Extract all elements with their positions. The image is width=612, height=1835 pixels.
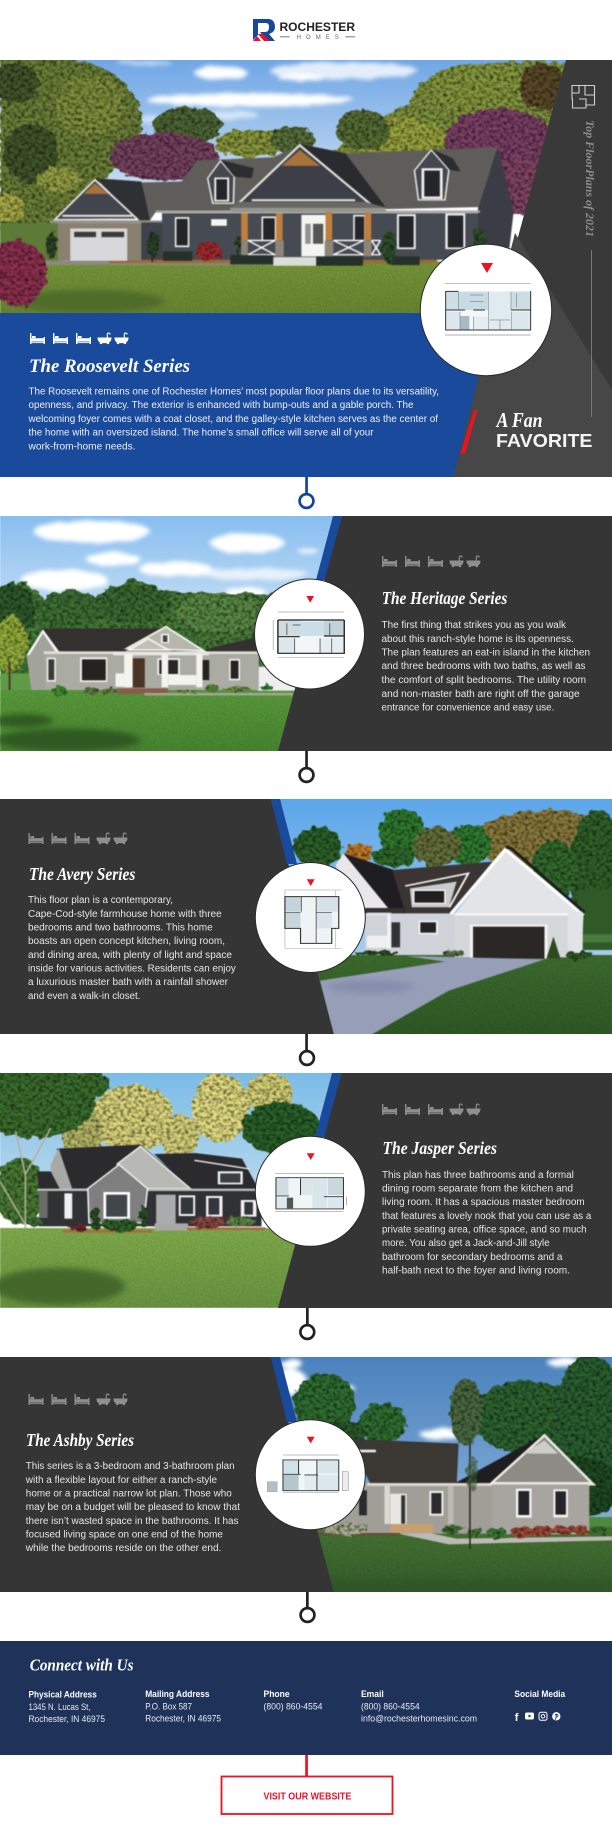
body text: half-bath next to the foyer and living room. bbox=[382, 1266, 570, 1276]
phone bbox=[264, 1689, 322, 1712]
floor plan circle bbox=[420, 244, 552, 376]
connector: hero to Heritage bbox=[300, 477, 313, 508]
floor plan drawing bbox=[275, 1173, 347, 1212]
icon: R house mark bbox=[253, 19, 275, 41]
body text: The first thing that strikes you as you walk bbox=[382, 620, 567, 631]
body text: more. You also get a Jack-and-Jill style bbox=[382, 1238, 550, 1249]
button: visit our website: VISIT OUR WEBSITE bbox=[264, 1792, 352, 1802]
icons: beds and baths bbox=[30, 333, 128, 344]
body text: This floor plan is a contemporary, bbox=[28, 895, 173, 906]
email: (800) 860-4554 bbox=[361, 1702, 420, 1712]
mailing address bbox=[145, 1689, 221, 1724]
panel: Jasper bbox=[0, 1061, 612, 1308]
social media bbox=[514, 1689, 566, 1724]
icon: floor plan outline bbox=[572, 86, 594, 108]
body text: living room. It has a spacious master bedroom bbox=[382, 1197, 585, 1208]
body text: dining room separate from the kitchen and bbox=[382, 1184, 573, 1194]
red marker bbox=[307, 1153, 315, 1160]
panel: Avery bbox=[0, 797, 612, 1035]
lighter facet bbox=[453, 233, 612, 477]
panel: Heritage bbox=[0, 513, 612, 753]
body text: the comfort of split bedrooms. The utility room bbox=[382, 675, 586, 686]
social media: Social Media bbox=[514, 1689, 566, 1700]
body text: about this ranch-style home is its openness. bbox=[382, 634, 574, 645]
mailing address: Rochester, IN 46975 bbox=[145, 1714, 221, 1724]
physical address: 1345 N. Lucas St, bbox=[28, 1702, 90, 1713]
phone: (800) 860-4554 bbox=[264, 1702, 322, 1712]
email: Email bbox=[361, 1689, 384, 1700]
body text: and even a walk-in closet. bbox=[28, 991, 140, 1002]
body text bbox=[382, 620, 590, 714]
heading: The Ashby Series bbox=[26, 1430, 134, 1450]
floor plan circle bbox=[255, 1136, 365, 1246]
body text: and non-master bath are right off the garage bbox=[382, 689, 580, 700]
body text: a luxurious master bath with a rainfall shower bbox=[28, 977, 229, 988]
body text: openness, and privacy. The exterior is enhanced with bump-outs and a gable porch. The bbox=[28, 400, 414, 411]
photo: Roosevelt house bbox=[0, 60, 566, 313]
physical address bbox=[28, 1690, 105, 1725]
body text: the home with an oversized island. The home’s small office will serve all of your bbox=[28, 428, 374, 439]
body text: welcoming foyer comes with a coat closet, and the galley-style kitchen serves as the center of bbox=[28, 414, 438, 425]
rotated series tag: Top FloorPlans of 2021 bbox=[583, 120, 597, 237]
body text: with a flexible layout for either a ranch-style bbox=[25, 1475, 217, 1486]
heading: The Jasper Series bbox=[382, 1138, 497, 1158]
red marker bbox=[306, 596, 314, 603]
dark text panel bbox=[0, 799, 334, 1034]
button: visit our website bbox=[222, 1776, 392, 1814]
physical address: Physical Address bbox=[28, 1690, 97, 1700]
body text bbox=[28, 895, 236, 1002]
body text: boasts an open concept kitchen, living room, bbox=[28, 936, 225, 947]
icon: pinterest bbox=[552, 1712, 560, 1721]
blue accent strip bbox=[271, 799, 297, 864]
photo: Ashby house bbox=[271, 1357, 612, 1592]
body text bbox=[382, 1170, 592, 1276]
floor plan circle bbox=[255, 862, 365, 972]
footer heading: Connect with Us bbox=[30, 1656, 134, 1674]
floor plan drawing bbox=[273, 612, 344, 657]
callout: A Fan Favorite bbox=[460, 408, 592, 454]
floor plan circle bbox=[255, 1420, 365, 1530]
heading: The Avery Series bbox=[29, 864, 136, 884]
body text: and dining area, with plenty of light and space bbox=[28, 950, 232, 961]
email: info@rochesterhomesinc.com bbox=[361, 1714, 477, 1724]
blue accent strip bbox=[271, 1357, 297, 1422]
floor plan drawing bbox=[267, 1455, 348, 1493]
body text: and three bedrooms with two baths, as well as bbox=[382, 661, 586, 672]
heading: The Heritage Series bbox=[382, 588, 508, 608]
email bbox=[361, 1689, 477, 1724]
body text: This series is a 3-bedroom and 3-bathroom plan bbox=[26, 1461, 235, 1472]
body text: home or a practical narrow lot plan. Those who bbox=[26, 1488, 232, 1500]
footer panel bbox=[0, 1641, 612, 1755]
blue accent strip bbox=[316, 516, 342, 580]
floor plan circle bbox=[254, 579, 364, 689]
icons: beds and baths bbox=[382, 1104, 480, 1115]
logo bbox=[253, 19, 356, 41]
body text: focused living space on one end of the home bbox=[26, 1530, 223, 1540]
icons: beds and baths bbox=[28, 833, 127, 844]
body text: while the bedrooms reside on the other end. bbox=[25, 1543, 221, 1554]
body text: The Roosevelt remains one of Rochester Homes’ most popular floor plans due to its versatility, bbox=[28, 386, 439, 398]
red marker bbox=[307, 1437, 315, 1443]
callout: A Fan Favorite: A Fan bbox=[495, 408, 542, 432]
heading: The Roosevelt Series bbox=[29, 356, 190, 377]
floor plan drawing bbox=[285, 890, 342, 948]
body text: private seating area, office space, and so much bbox=[382, 1224, 587, 1236]
floor plan drawing bbox=[445, 283, 531, 335]
logo sub-word: HOMES bbox=[297, 35, 339, 41]
icon: instagram bbox=[539, 1712, 547, 1720]
photo: Heritage house bbox=[0, 516, 342, 751]
icons: beds and baths bbox=[382, 556, 480, 567]
connector: footer to button bbox=[305, 1755, 308, 1776]
body text: Cape-Cod-style farmhouse home with three bbox=[28, 909, 222, 920]
connector: Jasper to Ashby bbox=[300, 1308, 314, 1339]
icon: facebook: f bbox=[515, 1712, 519, 1724]
connector: Avery to Jasper bbox=[300, 1034, 314, 1065]
dark text panel bbox=[278, 1073, 612, 1308]
body text: there isn’t wasted space in the bathrooms. It has bbox=[26, 1516, 238, 1527]
body text: This plan has three bathrooms and a formal bbox=[382, 1170, 574, 1181]
dark text panel bbox=[0, 1357, 334, 1592]
dark text panel bbox=[278, 516, 612, 751]
body text: entrance for convenience and easy use. bbox=[382, 702, 554, 714]
blue text panel bbox=[0, 313, 497, 477]
body text: that features a lovely nook that you can use as a bbox=[382, 1211, 592, 1222]
body text: The plan features an eat-in island in the kitchen bbox=[382, 648, 590, 658]
body text: work-from-home needs. bbox=[27, 441, 136, 452]
body text bbox=[27, 386, 439, 452]
photo: Jasper house bbox=[0, 1073, 342, 1308]
callout: A Fan Favorite: FAVORITE bbox=[496, 430, 592, 451]
body text: bedrooms and two bathrooms. This home bbox=[28, 922, 213, 934]
red marker bbox=[307, 879, 315, 886]
connector: Ashby to footer bbox=[301, 1592, 314, 1622]
body text: bathroom for secondary bedrooms and a bbox=[382, 1252, 563, 1263]
mailing address: P.O. Box 587 bbox=[145, 1702, 192, 1712]
photo: Avery house bbox=[271, 799, 612, 1034]
logo wordmark: ROCHESTER bbox=[280, 22, 356, 34]
blue accent strip bbox=[315, 1073, 342, 1137]
vertical rule bbox=[591, 250, 592, 417]
panel: Ashby bbox=[0, 1354, 612, 1594]
icons: beds and baths bbox=[28, 1394, 127, 1405]
icon: youtube bbox=[525, 1712, 534, 1720]
body text bbox=[25, 1461, 240, 1554]
mailing address: Mailing Address bbox=[145, 1689, 210, 1700]
connector: Heritage to Avery bbox=[300, 751, 313, 782]
red marker bbox=[481, 263, 493, 273]
dark side panel bbox=[453, 60, 612, 477]
body text: inside for various activities. Residents can enjoy bbox=[28, 964, 236, 974]
red slash bbox=[460, 410, 478, 454]
phone: Phone bbox=[264, 1689, 290, 1700]
body text: may be on a budget will be pleased to know that bbox=[26, 1502, 240, 1513]
physical address: Rochester, IN 46975 bbox=[28, 1714, 105, 1725]
panel: Roosevelt hero bbox=[0, 57, 612, 477]
